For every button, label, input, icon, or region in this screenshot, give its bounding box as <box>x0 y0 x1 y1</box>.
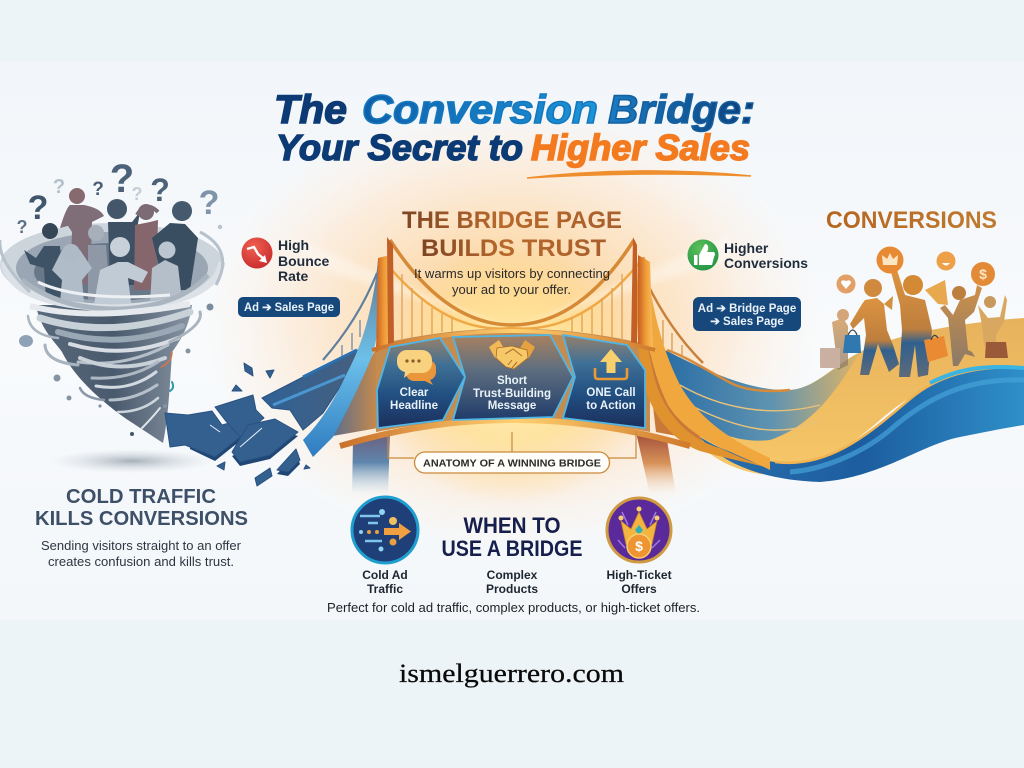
question marks <box>16 157 219 237</box>
callout: high bounce rate <box>242 237 330 284</box>
label: call to action: ONE Call <box>586 387 636 399</box>
callout: high bounce rate: High <box>278 237 309 253</box>
title: Your Secret to <box>276 127 523 168</box>
person dark right <box>152 223 198 290</box>
icon: dollar bubble: $ <box>979 266 987 282</box>
callout: higher conversions: Conversions <box>724 255 808 271</box>
background panel <box>0 62 1024 620</box>
label: high ticket offers: High-Ticket <box>606 568 672 582</box>
callout: higher conversions <box>688 240 808 271</box>
debris dots <box>19 225 222 436</box>
icon: cold ad traffic <box>352 497 418 563</box>
person light left <box>52 250 92 303</box>
question marks: ? <box>150 172 170 208</box>
confused crowd <box>24 188 198 310</box>
man arm raised <box>891 270 948 377</box>
left blue cable and hangers <box>323 273 377 360</box>
pill: ad to bridge to sales: ➔ Sales Page <box>710 316 784 328</box>
bridge <box>340 237 770 495</box>
pill: ad to bridge to sales <box>693 297 801 331</box>
question marks: ? <box>16 217 28 237</box>
text: bridge description: It warms up visitors by connecting <box>414 267 610 281</box>
icon: falling arrow <box>242 238 272 268</box>
question marks: ? <box>92 179 104 200</box>
text: cold traffic description: creates confusion and kills trust. <box>48 555 234 569</box>
right wedge <box>646 345 703 441</box>
tornado ground shadow <box>50 449 214 473</box>
person mauve arms up <box>60 205 104 285</box>
title: Conversion <box>362 88 598 132</box>
tornado funnel <box>28 305 200 443</box>
callout: higher conversions: Higher <box>724 240 769 256</box>
label: message: Message <box>488 400 536 412</box>
anatomy pill: ANATOMY OF A WINNING BRIDGE <box>423 458 601 470</box>
person dark centre <box>108 212 140 285</box>
heading: cold traffic kills conversions: KILLS CONVERSIONS <box>35 508 248 530</box>
icon: crown bubble <box>876 246 904 274</box>
anatomy pill <box>414 452 610 473</box>
icon: high ticket crown <box>607 498 671 562</box>
icon: high ticket crown: $ <box>635 538 643 554</box>
person jumping <box>940 285 982 366</box>
central warm glow <box>202 100 822 550</box>
title <box>274 88 755 178</box>
question marks: ? <box>53 176 65 198</box>
label: clear headline: Clear <box>400 387 429 399</box>
icon: heart bubble <box>836 274 856 294</box>
question marks: ? <box>28 189 48 227</box>
text: cold traffic description <box>41 539 241 569</box>
left girder <box>303 260 382 457</box>
anatomy panels <box>377 335 645 428</box>
deck beams <box>372 331 655 350</box>
heading: the bridge page builds trust <box>402 207 622 262</box>
heading: the bridge page builds trust: THE BRIDGE PAGE <box>402 207 622 234</box>
callout: high bounce rate: Bounce <box>278 253 330 269</box>
label: message: Trust-Building <box>473 388 551 400</box>
heading: conversions: CONVERSIONS <box>826 207 997 234</box>
text: cold traffic description: Sending visitors straight to an offer <box>41 539 241 553</box>
title underline <box>527 171 751 178</box>
person light front <box>93 262 148 310</box>
upper blue band <box>665 350 860 441</box>
road segment to tower <box>262 350 358 430</box>
text: bridge description: your ad to your offer. <box>452 283 571 297</box>
person far right <box>978 295 1008 358</box>
funnel rim back <box>0 223 224 307</box>
panel: call to action <box>563 335 645 428</box>
icon: dollar bubble <box>971 262 995 286</box>
icon: handshake <box>489 340 535 369</box>
panel: clear headline <box>377 338 465 428</box>
person light right <box>150 260 182 305</box>
label: cold ad traffic: Traffic <box>367 582 403 596</box>
label: call to action: to Action <box>586 400 636 412</box>
panel: message <box>453 335 573 420</box>
deck body <box>376 328 650 432</box>
woman walking <box>843 279 899 375</box>
label: complex products: Complex <box>487 568 538 582</box>
person dark left <box>24 246 64 300</box>
wedge under left deck <box>327 345 378 437</box>
person grey back <box>88 245 110 300</box>
text: perfect for: Perfect for cold ad traffic, complex products, or high-ticket offers. <box>327 601 700 615</box>
icon: upload <box>595 349 627 379</box>
funnel rim front <box>0 232 223 314</box>
heading: cold traffic kills conversions <box>35 486 248 530</box>
label: message: Short <box>497 375 527 387</box>
heading: when to use a bridge: WHEN TO <box>464 513 560 538</box>
lower blue band <box>700 367 1024 482</box>
bag between <box>925 280 948 305</box>
label: clear headline: Headline <box>390 400 438 412</box>
right golden girder <box>637 257 770 468</box>
tornado <box>0 157 224 473</box>
icon: smile bubble <box>936 252 956 270</box>
person red <box>134 220 158 290</box>
question marks: ? <box>132 184 142 204</box>
suspension cables <box>385 240 703 363</box>
pill: ad to sales page: Ad ➔ Sales Page <box>244 302 334 314</box>
right wave road <box>665 318 1024 482</box>
text: bridge description <box>414 267 610 297</box>
icon: thumbs up <box>688 240 718 270</box>
heading: when to use a bridge: USE A BRIDGE <box>442 536 582 561</box>
footer url: ismelguerrero.com <box>399 659 624 688</box>
title: Higher Sales <box>531 127 750 168</box>
towers <box>376 237 653 352</box>
piers <box>352 430 676 495</box>
connector lines <box>388 432 636 458</box>
heading: when to use a bridge <box>442 513 582 561</box>
title: The <box>274 88 347 132</box>
heading: cold traffic kills conversions: COLD TRAFFIC <box>66 486 216 508</box>
happy customers <box>820 246 1008 377</box>
label: complex products: Products <box>486 582 538 596</box>
pill: ad to bridge to sales: Ad ➔ Bridge Page <box>698 303 796 315</box>
gold hill <box>680 318 1024 474</box>
heading: the bridge page builds trust: BUILDS TRUST <box>421 235 606 262</box>
label: high ticket offers: Offers <box>621 582 657 596</box>
callout: high bounce rate: Rate <box>278 268 309 284</box>
label: cold ad traffic: Cold Ad <box>362 568 408 582</box>
broken bridge road <box>165 260 382 486</box>
question marks: ? <box>110 157 134 201</box>
person faded left <box>820 309 849 370</box>
pill: ad to sales page <box>238 297 340 317</box>
title: Bridge: <box>608 88 755 132</box>
question marks: ? <box>199 184 219 222</box>
icon: chat bubbles <box>397 350 436 385</box>
